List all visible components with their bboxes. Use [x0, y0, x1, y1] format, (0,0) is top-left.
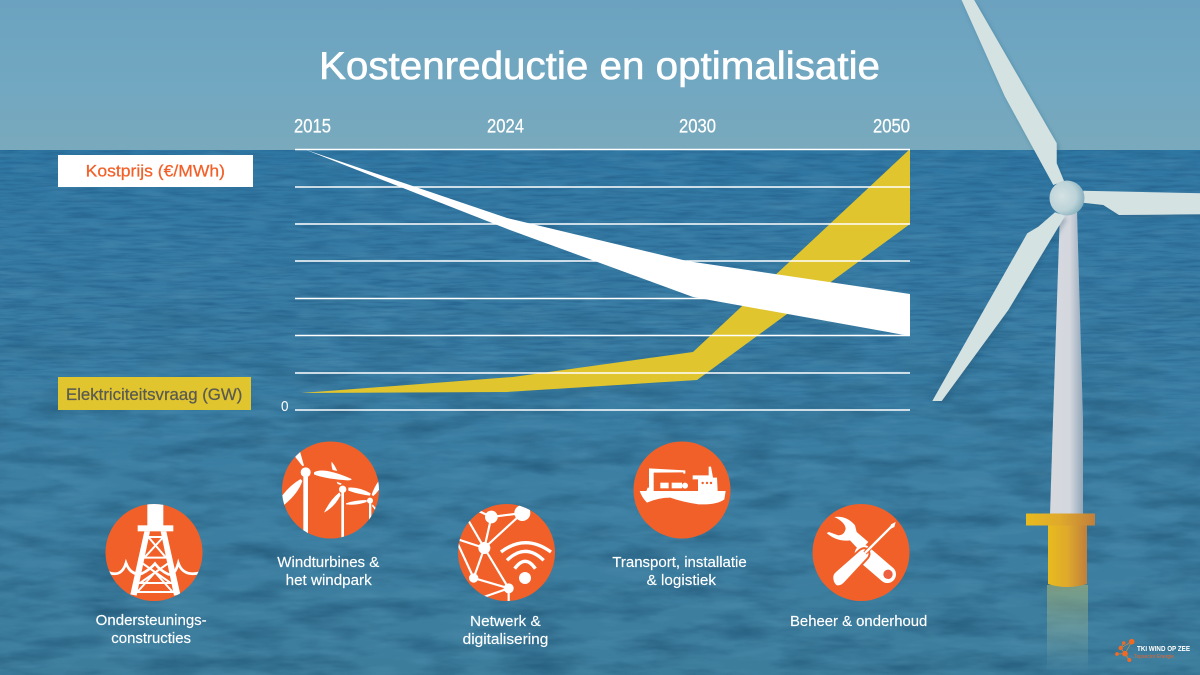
logo: TKI Wind op Zee: Topsector Energie — [1134, 654, 1174, 660]
label: support structures: Ondersteunings- — [96, 613, 207, 629]
icon: tools — [812, 504, 910, 601]
series: electricity demand band — [301, 149, 910, 393]
label: wind turbines: het windpark — [286, 573, 372, 589]
series: cost price band — [305, 150, 910, 336]
chart: cost price and electricity demand — [281, 116, 910, 415]
legend: Elektriciteitsvraag — [58, 377, 251, 410]
label: tools: Beheer & onderhoud — [790, 614, 927, 630]
turbine reflection — [1047, 585, 1088, 670]
transition piece — [1048, 525, 1087, 587]
label: support structures: constructies — [111, 631, 191, 647]
label: transport: Transport, installatie — [612, 555, 747, 571]
turbine tower — [1050, 210, 1083, 515]
flange — [1026, 514, 1095, 526]
y-axis zero: 0 — [281, 398, 288, 415]
label: network and digitalisation: Netwerk & — [470, 614, 541, 630]
legend: Kostprijs — [58, 155, 253, 187]
legend: Kostprijs: Kostprijs (€/MWh) — [86, 162, 225, 181]
title: Kostenreductie en optimalisatie — [319, 45, 880, 88]
label: network and digitalisation — [463, 614, 548, 648]
icon: support structures — [106, 500, 202, 601]
icon: wind turbines — [281, 442, 380, 541]
label: transport: & logistiek — [647, 573, 717, 589]
x-axis years: 2024 — [487, 116, 524, 138]
label: transport — [612, 555, 747, 589]
x-axis years — [294, 116, 910, 138]
label: wind turbines: Windturbines & — [277, 555, 380, 571]
label: support structures — [96, 613, 207, 647]
screwdriver — [832, 522, 896, 586]
logo: TKI Wind op Zee — [1115, 639, 1190, 662]
icon: network and digitalisation — [457, 504, 555, 605]
logo: TKI Wind op Zee: TKI WIND OP ZEE — [1137, 646, 1190, 653]
x-axis years: 2030 — [679, 116, 716, 138]
x-axis years: 2050 — [873, 116, 910, 138]
label: wind turbines — [277, 555, 380, 589]
hub — [1050, 180, 1084, 216]
rotor blades — [932, 0, 1200, 401]
x-axis years: 2015 — [294, 116, 331, 138]
wrench — [827, 517, 893, 579]
background: sea with wave texture — [0, 150, 1200, 675]
icon: transport ship — [634, 442, 730, 538]
legend: Elektriciteitsvraag: Elektriciteitsvraag (GW) — [66, 385, 242, 404]
gridlines — [295, 150, 910, 410]
label: network and digitalisation: digitalisering — [463, 632, 548, 648]
background: sky — [0, 0, 1200, 151]
wind turbine — [932, 0, 1200, 670]
